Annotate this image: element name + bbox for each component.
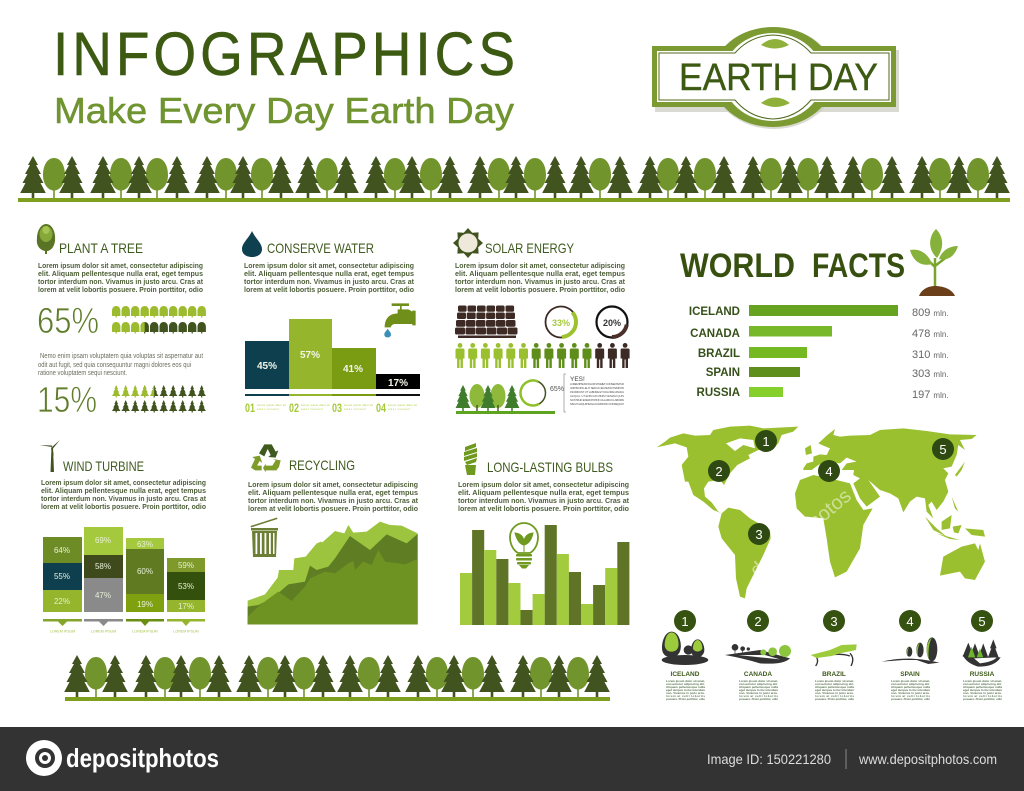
country: Brazil: posuere. Proin porttitor, odio [815,697,854,701]
country: Iceland: eget tempus tortor interdum [666,688,705,692]
gauge: 65%: 65% [550,386,564,393]
country: Spain [882,610,939,701]
text block: tortor interdum non. Vivamus in justo arcu. Cras at [38,277,203,286]
icon: wind turbine [40,440,60,472]
bar chart: water: amet consect [257,407,279,411]
gauge: 65% [516,376,564,410]
stacked bar chart: 58% [95,562,111,571]
bar chart: bulbs [460,525,629,625]
country: Brazil: consectetur adipiscing elit. [815,682,854,686]
small tree group [456,384,555,414]
country: Brazil: non. Vivamus in justo arcu. [815,691,854,695]
country: Canada: Aliquam pellentesque nulla [739,685,778,689]
text block [458,480,629,513]
icon: water drop [242,231,262,257]
text block: elit. Aliquam pellentesque nulla erat, eget tempus [244,269,414,278]
bar: Spain [706,367,949,380]
bar: Brazil [698,347,949,361]
text block: Lorem ipsum dolor sit amet, consectetur adipiscing [455,261,625,270]
stat: 15%: 15% [37,379,97,420]
country: Canada: non. Vivamus in justo arcu. [739,691,778,695]
text block: lorem at velit lobortis posuere. Proin porttitor, odio [38,285,203,294]
country: Canada: CANADA [744,671,772,678]
gauge: 33%: 33% [552,318,570,328]
stacked bar chart: LOREM IPSUM [91,630,116,634]
bar chart: water: 57% [300,350,320,361]
logo: depositphotos: depositphotos [66,743,219,773]
country: Iceland: non. Vivamus in justo arcu. [666,691,705,695]
bar: Russia [697,387,949,401]
bar: Spain: SPAIN [706,367,740,379]
bar chart: water: 02 [289,401,299,415]
icon: tree [37,224,55,254]
bar chart: water: 01 [245,401,255,415]
marker 3: 3 [755,527,763,542]
watermark: depositphotos [746,485,856,582]
callout: yes: NISI UT ALIQUIP EX EA COMMODO CONSEQUAT [570,402,624,406]
country: Iceland: 1 [681,614,689,629]
stacked bar chart: 47% [95,591,111,600]
stacked bar chart: 59% [178,561,194,570]
marker 5: 5 [939,442,947,457]
icon: recycle [251,444,281,472]
text block [244,261,414,294]
text block: lorem at velit lobortis posuere. Proin porttitor, odio [244,285,414,294]
icon: spiral bulb [464,443,477,475]
bar chart: water: 17% [388,378,408,389]
footer bar [0,727,1024,791]
panel: recycling [248,444,418,624]
pictogram: 15 percent trees [112,385,206,412]
bar chart: water: amet consect [388,407,410,411]
country: Russia: RUSSIA [970,671,995,678]
heading: SOLAR ENERGY [485,240,575,256]
website: www.depositphotos.com [858,751,997,767]
logo: depositphotos [26,740,219,776]
stacked bar chart: LOREM IPSUM [173,630,199,634]
text block: lorem at velit lobortis posuere. Proin porttitor, odio [455,285,625,294]
country: Iceland: lorem at velit lobortis [666,694,705,698]
panel: solar energy [453,228,630,414]
text block [41,478,206,511]
country: Iceland [662,610,708,701]
callout: yes: YES! [570,376,585,383]
text block: lorem at velit lobortis posuere. Proin porttitor, odio [248,504,418,513]
callout: yes: ADIPISCING ELIT. SED DO EIUSMOD TEMPOR [570,386,624,390]
bar chart: water: Lorem ipsum dolor sit [301,403,330,407]
stacked bar chart: 60% [137,567,153,576]
country: Spain: lorem at velit lobortis [891,694,930,698]
badge: Earth Day: EARTH DAY [679,57,878,99]
bar chart: water: amet consect [344,407,366,411]
country: Spain: 4 [906,614,914,629]
bar list [689,305,949,401]
marker 4 [818,460,840,482]
country: Russia: non. Vivamus in justo arcu. [963,691,1002,695]
bar chart: water: 45% [257,361,277,372]
tree row: top [18,156,1010,202]
stacked bar chart: 64% [54,546,70,555]
country: Iceland: Lorem ipsum dolor sit amet, [666,679,705,683]
icon: faucet [384,303,416,337]
marker 1: 1 [762,434,770,449]
heading: RECYCLING [289,457,355,473]
heading: CONSERVE WATER [267,240,374,256]
text block: elit. Aliquam pellentesque nulla erat, eget tempus [38,269,203,278]
country: Brazil: eget tempus tortor interdum [815,688,854,692]
stacked bar chart: 69% [95,536,111,545]
stacked bar chart [43,527,205,634]
panel: plant a tree [37,224,206,420]
country: Spain: SPAIN [900,671,920,678]
stacked bar chart: 19% [137,600,153,609]
text block: nemo: Nemo enim ipsam voluptatem quia voluptas sit aspernatur aut [40,353,203,360]
badge: Earth Day [652,27,899,129]
country: Spain: non. Vivamus in justo arcu. [891,691,930,695]
country: Russia: Aliquam pellentesque nulla [963,685,1002,689]
bar chart: water: Lorem ipsum dolor sit [388,403,417,407]
marker 2: 2 [715,464,723,479]
country: Canada: lorem at velit lobortis [739,694,778,698]
icon: solar panel [455,306,518,338]
text block: lorem at velit lobortis posuere. Proin porttitor, odio [41,502,206,511]
marker 1 [755,430,777,452]
country: Spain: Aliquam pellentesque nulla [891,685,930,689]
country: Spain: Lorem ipsum dolor sit amet, [891,679,930,683]
text block: Lorem ipsum dolor sit amet, consectetur adipiscing [244,261,414,270]
bar chart: water [245,319,420,415]
stacked bar chart: LOREM IPSUM [132,630,158,634]
text block: Lorem ipsum dolor sit amet, consectetur adipiscing [248,480,418,489]
bar chart: water: 03 [332,401,342,415]
bar chart: water: 04 [376,401,386,415]
bar: Brazil: 310 mln. [912,349,949,361]
marker 5 [932,438,954,460]
text block [248,480,418,513]
country: Brazil: 3 [830,614,838,629]
stacked bar chart: LOREM IPSUM [50,630,75,634]
marker 2 [708,460,730,482]
country: Canada: eget tempus tortor interdum [739,688,778,692]
country: Brazil: lorem at velit lobortis [815,694,854,698]
text block [455,261,625,294]
callout: yes: INCIDIDUNT UT LABORE ET DOLORE MAGNA [570,390,624,394]
stacked bar chart: 17% [178,602,194,611]
stacked bar chart: 22% [54,597,70,606]
bar: Canada [690,326,949,340]
bar chart: water: amet consect [301,407,323,411]
text block: elit. Aliquam pellentesque nulla erat, eget tempus [458,488,629,497]
icon: sprout [910,229,958,296]
gauge: 20% [595,305,629,339]
callout: yes: ALIQUA. UT ENIM AD MINIM VENIAM QUIS [570,394,624,398]
panel: long-lasting bulbs [458,443,629,625]
text block: Lorem ipsum dolor sit amet, consectetur adipiscing [38,261,203,270]
icon: light bulb with sprout [510,523,538,568]
stat: 65%: 65% [37,300,99,341]
gauge: 20%: 20% [603,318,621,328]
bar: Russia: 197 mln. [912,389,949,401]
heading: WIND TURBINE [63,458,144,474]
text block: tortor interdum non. Vivamus in justo arcu. Cras at [41,494,206,503]
text block: elit. Aliquam pellentesque nulla erat, eget tempus [248,488,418,497]
country: Canada [725,610,791,701]
bar: Brazil: BRAZIL [698,348,740,360]
country: Canada: consectetur adipiscing elit. [739,682,778,686]
title: INFOGRAPHICS [53,20,515,89]
stacked bar chart: 53% [178,582,194,591]
callout: yes: NOSTRUD EXERCITATION ULLAMCO LABORIS [570,398,624,402]
bar: Iceland: 809 mln. [912,307,949,319]
country: Spain: posuere. Proin porttitor, odio [891,697,930,701]
text block [38,261,203,294]
heading [680,247,905,285]
country: Brazil: Lorem ipsum dolor sit amet, [815,679,854,683]
bar: Iceland: ICELAND [689,306,740,318]
text block: nemo: ratione voluptatem sequi nesciunt. [38,370,127,377]
marker 3 [748,523,770,545]
text block: nemo: odit aut fugit, sed quia consequuntur magni dolores eos qui [38,362,191,369]
panel: world facts [680,229,958,401]
country: Spain: consectetur adipiscing elit. [891,682,930,686]
country: Russia: 5 [978,614,986,629]
country: Brazil: Aliquam pellentesque nulla [815,685,854,689]
text block: Lorem ipsum dolor sit amet, consectetur adipiscing [458,480,629,489]
country: Russia: posuere. Proin porttitor, odio [963,697,1002,701]
tree row: bottom [64,655,610,701]
pictogram: 65 percent trees [112,306,206,334]
country: Russia: Lorem ipsum dolor sit amet, [963,679,1002,683]
bar chart: water: Lorem ipsum dolor sit [344,403,373,407]
bar chart: water: 41% [343,364,363,375]
bar: Spain: 303 mln. [912,368,949,380]
bar: Russia: RUSSIA [697,387,740,399]
panel: wind turbine [40,440,206,634]
marker 4: 4 [825,464,833,479]
text block: elit. Aliquam pellentesque nulla erat, eget tempus [41,486,206,495]
text block: tortor interdum non. Vivamus in justo arcu. Cras at [455,277,625,286]
country: Russia [963,610,1002,701]
text block: Lorem ipsum dolor sit amet, consectetur adipiscing [41,478,206,487]
panel: conserve water [242,231,420,415]
heading: PLANT A TREE [59,240,143,256]
bar: Iceland [689,305,949,319]
country: Iceland: ICELAND [671,671,700,678]
area chart [248,522,418,624]
heading: FACTS [812,247,905,285]
text block: tortor interdum non. Vivamus in justo arcu. Cras at [458,496,629,505]
stacked bar chart: 63% [137,540,153,549]
text block: tortor interdum non. Vivamus in justo arcu. Cras at [244,277,414,286]
pictogram: people [456,343,630,368]
heading: WORLD [680,247,795,285]
country: Iceland: posuere. Proin porttitor, odio [666,697,705,701]
country: Russia: eget tempus tortor interdum [963,688,1002,692]
heading: LONG-LASTING BULBS [487,459,613,475]
text block: nemo [38,353,203,377]
bar: Canada: 478 mln. [912,328,949,340]
country: Iceland: consectetur adipiscing elit. [666,682,705,686]
country: Canada: posuere. Proin porttitor, odio [739,697,778,701]
text block: lorem at velit lobortis posuere. Proin porttitor, odio [458,504,629,513]
image id: Image ID: 150221280 [707,751,831,767]
world map [657,426,985,598]
text block: tortor interdum non. Vivamus in justo arcu. Cras at [248,496,418,505]
bar chart: water: Lorem ipsum dolor sit [257,403,286,407]
country: Brazil [811,610,857,701]
country: Iceland: Aliquam pellentesque nulla [666,685,705,689]
country: Spain: eget tempus tortor interdum [891,688,930,692]
gauge: 33% [540,301,582,343]
callout: yes [564,374,624,412]
country: Russia: lorem at velit lobortis [963,694,1002,698]
country: Canada: 2 [754,614,762,629]
subtitle: Make Every Day Earth Day [54,90,514,131]
country: Brazil: BRAZIL [822,671,846,678]
country: Russia: consectetur adipiscing elit. [963,682,1002,686]
icon: sun [453,228,483,258]
country: Canada: Lorem ipsum dolor sit amet, [739,679,778,683]
bar: Canada: CANADA [690,328,740,340]
text block: elit. Aliquam pellentesque nulla erat, eget tempus [455,269,625,278]
stacked bar chart: 55% [54,572,70,581]
icon: trash bin [250,518,278,557]
callout: yes: LOREM IPSUM DOLOR SIT AMET, CONSECTETUR [570,382,624,386]
